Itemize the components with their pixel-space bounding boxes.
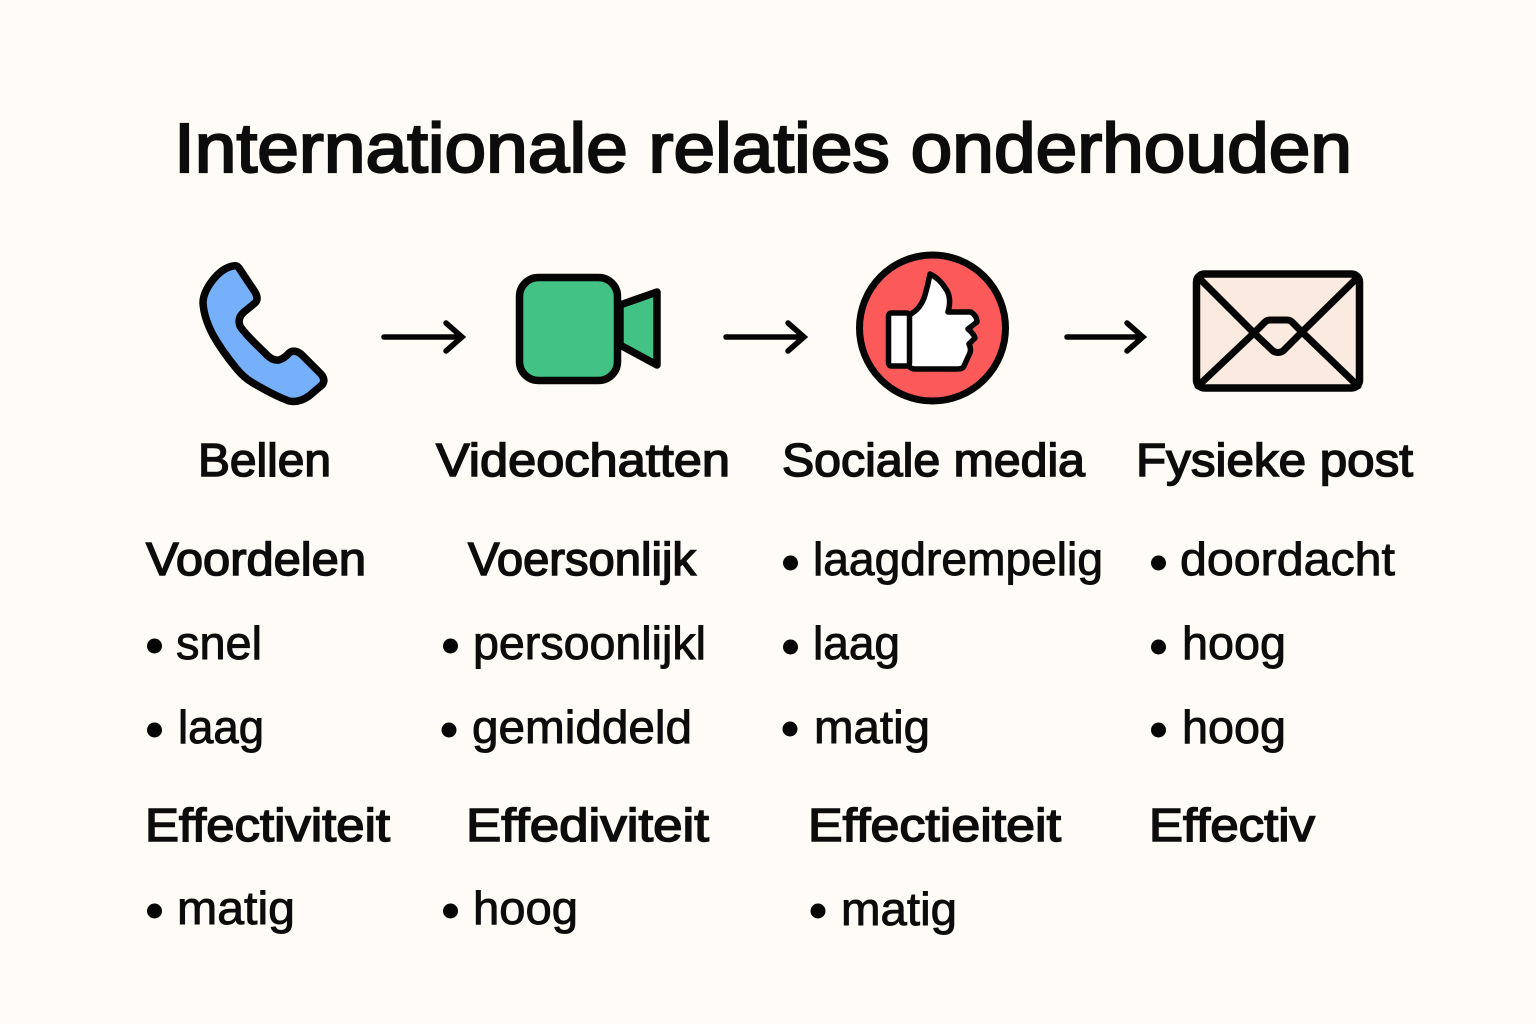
icon: video camera	[520, 278, 657, 380]
arrow: sociale media to fysieke post	[1067, 323, 1143, 351]
list item: matig: matig	[841, 883, 957, 935]
list item: matig: matig	[177, 882, 295, 934]
list item: laagdrempelig: laagdrempelig	[813, 533, 1103, 585]
column: Bellen	[145, 533, 390, 934]
subheading: Voersonlijk: Voersonlijk	[468, 533, 697, 585]
arrow: bellen to videochatten	[384, 323, 462, 351]
list item: hoog: hoog	[1182, 617, 1286, 669]
title: Internationale relaties onderhouden	[174, 109, 1352, 187]
column: Videochatten	[442, 533, 709, 934]
icon: thumbs up	[860, 255, 1006, 401]
list item: persoonlijkl: persoonlijkl	[473, 617, 706, 669]
subheading: Effectiviteit: Effectiviteit	[145, 799, 390, 851]
heading: Videochatten: Videochatten	[436, 434, 730, 486]
list item: hoog: hoog	[473, 882, 578, 934]
list item: laag: laag	[178, 701, 264, 753]
subheading: Voordelen: Voordelen	[146, 533, 366, 585]
subheading: Effediviteit: Effediviteit	[466, 799, 709, 851]
list item: doordacht: doordacht	[1180, 533, 1395, 585]
heading: Sociale media: Sociale media	[782, 434, 1085, 486]
list item: hoog: hoog	[1182, 701, 1286, 753]
list item: matig: matig	[814, 701, 930, 753]
list item: laag: laag	[813, 617, 900, 669]
arrow: videochatten to sociale media	[726, 323, 804, 351]
list item: snel: snel	[176, 617, 262, 669]
icon: phone	[203, 266, 324, 401]
subheading: Effectieiteit: Effectieiteit	[808, 799, 1061, 851]
heading: Bellen: Bellen	[198, 434, 331, 486]
list item: gemiddeld: gemiddeld	[472, 701, 692, 753]
column: Sociale media	[782, 533, 1103, 935]
subheading: Effectiv: Effectiv	[1149, 799, 1315, 851]
heading: Fysieke post: Fysieke post	[1136, 434, 1413, 486]
icon: envelope	[1196, 274, 1360, 388]
column: Fysieke post	[1149, 533, 1395, 851]
